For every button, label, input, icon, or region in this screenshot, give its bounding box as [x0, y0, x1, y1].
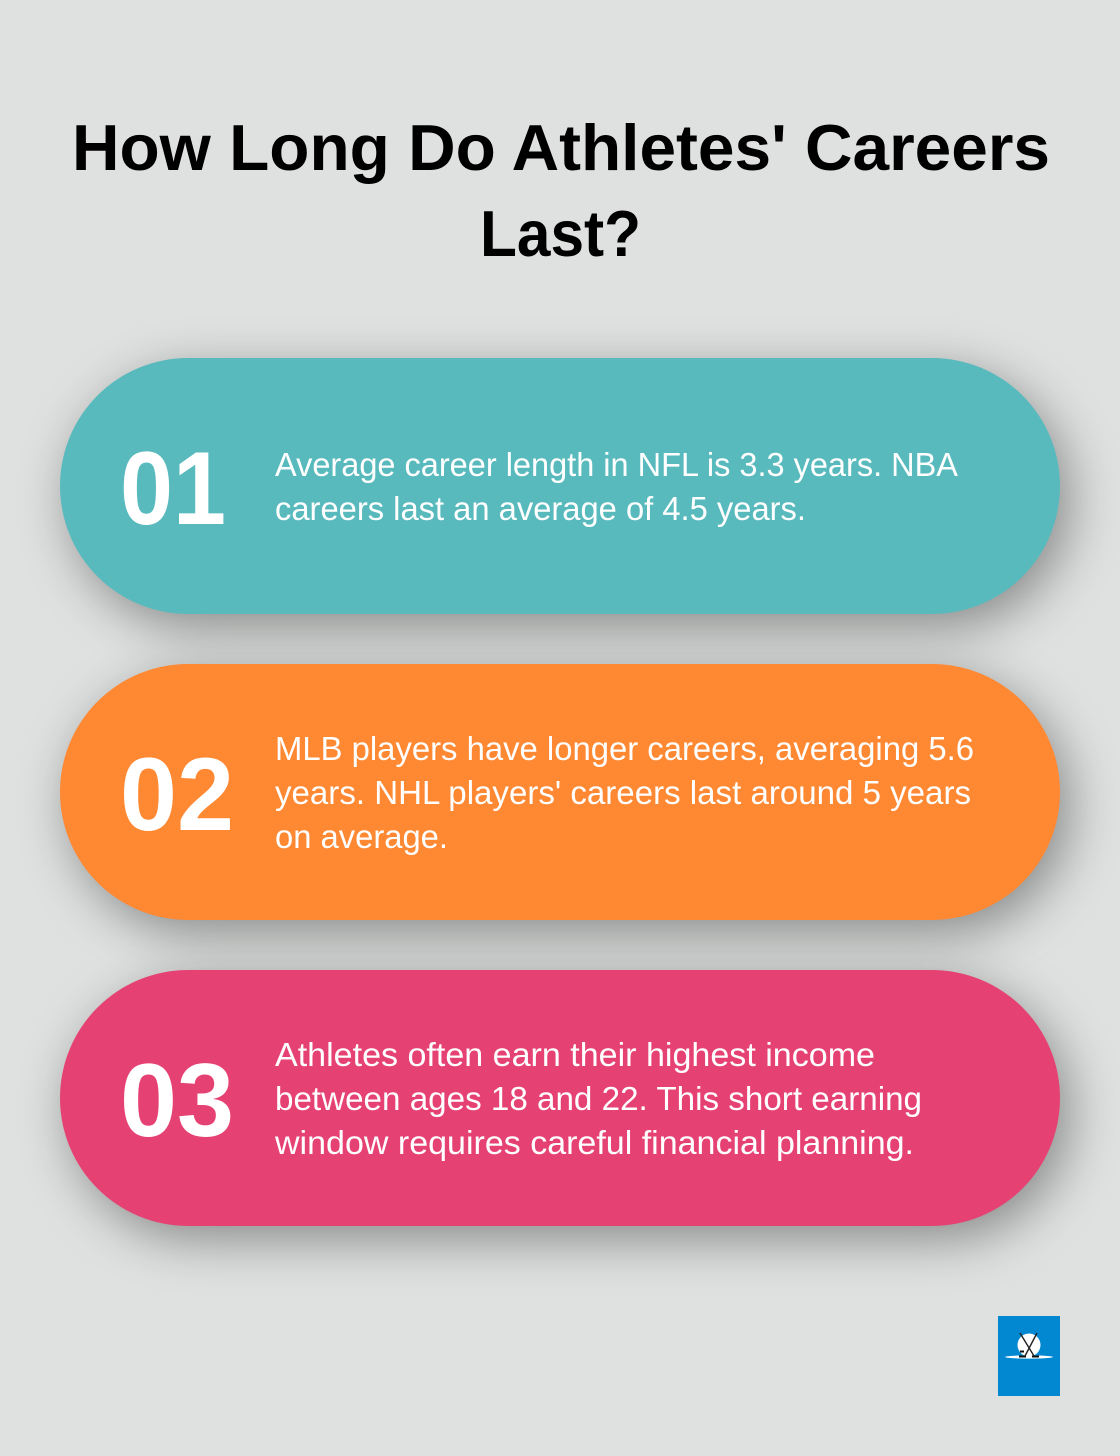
- text block: MLB and NHL career length: MLB players have longer careers, averaging 5.6: [275, 730, 974, 767]
- logo badge: [998, 1316, 1060, 1396]
- panel: earnings pink pill: [60, 970, 1060, 1226]
- text block: earning window: Athletes often earn their highest income: [275, 1036, 875, 1073]
- title: Last?: [480, 197, 641, 270]
- title: How Long Do Athletes' Careers: [72, 111, 1050, 184]
- text block: earning window: [274, 1036, 922, 1161]
- icon: crossed hockey sticks logo: [1005, 1333, 1053, 1359]
- number 02: 02: [120, 737, 234, 853]
- panel: MLB NHL orange pill: [60, 664, 1060, 920]
- text block: MLB and NHL career length: years. NHL players' careers last around 5 years: [275, 774, 971, 811]
- number 03: 03: [120, 1043, 234, 1159]
- text block: NFL and NBA career length: Average career length in NFL is 3.3 years. NBA: [275, 446, 958, 483]
- text block: earning window: between ages 18 and 22. This short earning: [275, 1080, 922, 1117]
- text block: MLB and NHL career length: on average.: [275, 818, 448, 855]
- text block: earning window: window requires careful financial planning.: [274, 1124, 914, 1161]
- text block: NFL and NBA career length: [275, 446, 958, 527]
- number 01: 01: [120, 431, 226, 547]
- text block: MLB and NHL career length: [275, 730, 974, 855]
- title: [72, 111, 1050, 270]
- panel: career length teal pill: [60, 358, 1060, 614]
- text block: NFL and NBA career length: careers last an average of 4.5 years.: [275, 490, 806, 527]
